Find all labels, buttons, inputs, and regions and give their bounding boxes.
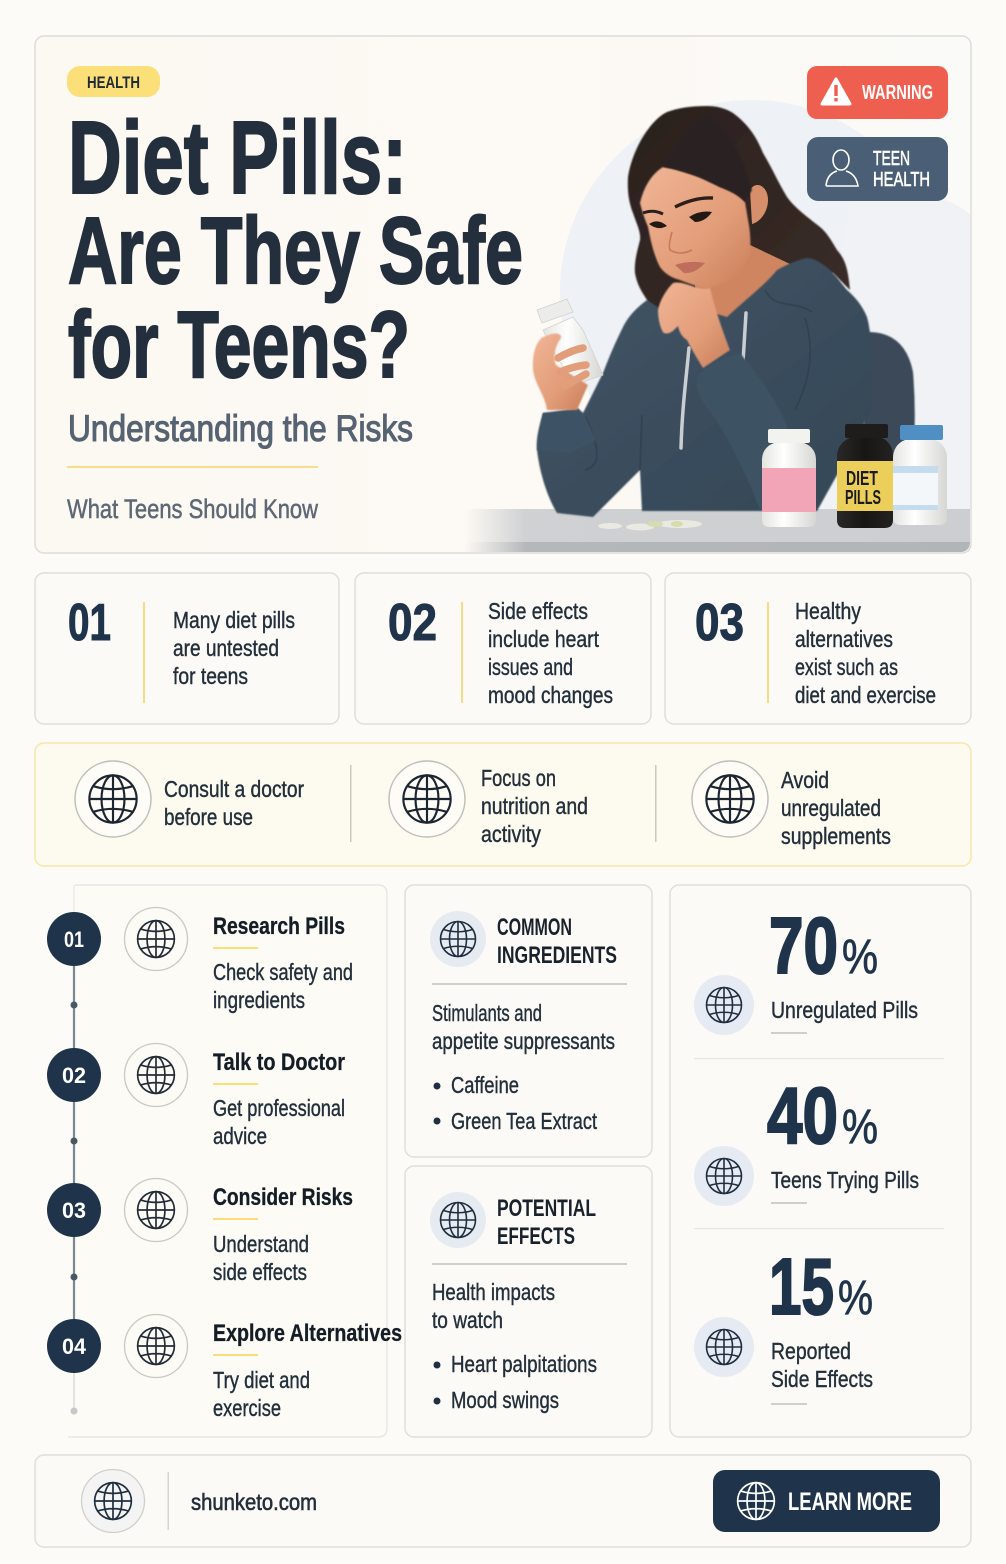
badge: teen health: TEEN xyxy=(873,148,910,170)
panel: potential effects: EFFECTS xyxy=(497,1223,575,1250)
icon: website globe xyxy=(82,1470,144,1532)
bottle in hand xyxy=(537,299,603,383)
panel: statistics xyxy=(670,885,971,1437)
advice: focus on nutrition xyxy=(389,761,588,847)
step 01: Check safety and xyxy=(213,959,353,985)
panel: key point 02 xyxy=(355,573,651,724)
step 01 xyxy=(47,908,353,1013)
panel: hero xyxy=(35,36,971,553)
badge: teen health: HEALTH xyxy=(873,169,930,191)
fingers on bottle xyxy=(558,348,586,386)
panel: key point 02: 02 xyxy=(388,594,437,652)
panel: key point 02: include heart xyxy=(488,626,600,652)
panel: potential effects xyxy=(405,1166,652,1437)
panel: key point 03: 03 xyxy=(695,594,744,652)
hand under chin xyxy=(658,283,730,368)
panel: key point 03 xyxy=(665,573,971,724)
panel: potential effects: Health impacts xyxy=(432,1279,555,1305)
panel: key point 01: for teens xyxy=(173,663,248,689)
panel: potential effects: POTENTIAL xyxy=(497,1195,596,1222)
stat: 15%: Side Effects xyxy=(771,1366,873,1392)
hoodie body xyxy=(537,258,873,517)
badge: teen health xyxy=(807,137,948,201)
step 04 xyxy=(47,1314,402,1421)
bottle: DIET PILLS xyxy=(837,424,893,528)
bottle: DIET PILLS: DIET xyxy=(846,468,878,490)
panel: key point 01: Many diet pills xyxy=(173,607,295,633)
stat: 40% xyxy=(694,1071,919,1206)
eyebrows, eyes, mouth xyxy=(643,198,713,273)
advice: consult a doctor xyxy=(75,761,304,837)
panel: common ingredients xyxy=(405,885,652,1157)
ear xyxy=(750,185,768,224)
panel: footer xyxy=(35,1455,971,1547)
chair xyxy=(864,331,916,458)
stat: 40%: % xyxy=(842,1101,878,1154)
stat: 40%: Teens Trying Pills xyxy=(771,1167,919,1193)
panel: key point 03: exist such as xyxy=(795,654,898,680)
face xyxy=(640,167,750,288)
stat: 40%: 40 xyxy=(767,1071,838,1160)
step 02: Get professional xyxy=(213,1095,345,1121)
stat: 70%: 70 xyxy=(769,901,838,990)
website address: shunketo.com xyxy=(191,1489,317,1515)
advice: avoid unregulated supplements: supplements xyxy=(781,823,891,849)
step 04: Try diet and xyxy=(213,1367,310,1393)
panel: key point 01: 01 xyxy=(68,594,111,652)
button: learn more xyxy=(713,1470,940,1532)
stat: 70%: % xyxy=(842,931,878,984)
title: Diet Pills: xyxy=(68,100,407,215)
panel: advice band xyxy=(35,743,971,866)
step 03: Understand xyxy=(213,1231,309,1257)
panel: key point 02: mood changes xyxy=(488,682,613,708)
advice: focus on nutrition: activity xyxy=(481,821,541,847)
advice: focus on nutrition: nutrition and xyxy=(481,793,588,819)
category tag: HEALTH xyxy=(87,73,140,92)
title: Are They Safe xyxy=(68,198,523,304)
bottle: DIET PILLS: PILLS xyxy=(845,487,881,509)
left cuff xyxy=(537,408,596,452)
stat: 15% xyxy=(694,1242,873,1405)
step 04: exercise xyxy=(213,1395,281,1421)
panel: key point 02: issues and xyxy=(488,654,573,680)
badge: warning xyxy=(807,66,948,119)
table xyxy=(465,509,971,553)
stat: 70%: Unregulated Pills xyxy=(771,997,918,1023)
bottle: blue cap xyxy=(893,425,947,525)
badge: warning: WARNING xyxy=(862,82,933,104)
panel: potential effects: Mood swings xyxy=(451,1387,559,1413)
stat: 15%: 15 xyxy=(769,1242,834,1331)
left hand xyxy=(533,334,588,410)
stat: 15%: % xyxy=(838,1272,873,1325)
advice: consult a doctor: before use xyxy=(164,804,253,830)
panel: key point 01 xyxy=(35,573,339,724)
stat: 15%: Reported xyxy=(771,1338,851,1364)
step 02: 02 xyxy=(62,1063,86,1088)
bottle: pink label xyxy=(762,429,816,527)
hair back xyxy=(626,104,851,309)
panel: common ingredients: Green Tea Extract xyxy=(451,1108,597,1134)
panel: common ingredients: appetite suppressants xyxy=(432,1028,615,1054)
panel: key point 03: alternatives xyxy=(795,626,893,652)
panel: key point 02: Side effects xyxy=(488,598,588,624)
panel: steps timeline xyxy=(47,885,402,1437)
button: learn more: LEARN MORE xyxy=(788,1488,912,1516)
title: for Teens? xyxy=(68,292,410,398)
illustration: teen holding pill bottle at a table xyxy=(465,100,971,553)
step 01: Research Pills xyxy=(213,913,345,940)
panel: key point 03: Healthy xyxy=(795,598,861,624)
panel: common ingredients: COMMON xyxy=(497,914,572,941)
category tag xyxy=(67,66,160,97)
panel: key point 01: are untested xyxy=(173,635,279,661)
panel: key point 03: diet and exercise xyxy=(795,682,936,708)
panel: potential effects: Heart palpitations xyxy=(451,1351,597,1377)
advice: avoid unregulated supplements xyxy=(692,761,891,849)
advice: avoid unregulated supplements: Avoid xyxy=(781,767,829,793)
step 03: side effects xyxy=(213,1259,307,1285)
step 03: Consider Risks xyxy=(213,1184,353,1211)
drawstrings xyxy=(681,313,746,448)
loose pills xyxy=(598,520,702,530)
step 01: 01 xyxy=(64,927,84,952)
step 02: advice xyxy=(213,1123,267,1149)
step 04: Explore Alternatives xyxy=(213,1320,402,1347)
step 03 xyxy=(47,1178,353,1285)
panel: potential effects: to watch xyxy=(432,1307,503,1333)
step 02: Talk to Doctor xyxy=(213,1049,345,1076)
neck xyxy=(695,245,790,318)
step 01: ingredients xyxy=(213,987,305,1013)
step 03: 03 xyxy=(62,1198,86,1223)
stat: 70% xyxy=(694,901,918,1035)
tagline: What Teens Should Know xyxy=(67,494,318,524)
hoodie folds xyxy=(585,290,812,470)
advice: avoid unregulated supplements: unregulated xyxy=(781,795,881,821)
sleeve on propped arm xyxy=(722,354,787,510)
step 04: 04 xyxy=(62,1334,87,1359)
advice: consult a doctor: Consult a doctor xyxy=(164,776,304,802)
panel: common ingredients: Stimulants and xyxy=(432,1000,542,1026)
advice: focus on nutrition: Focus on xyxy=(481,765,556,791)
title xyxy=(68,100,523,398)
panel: common ingredients: INGREDIENTS xyxy=(497,942,617,969)
step 02 xyxy=(47,1044,345,1149)
panel: common ingredients: Caffeine xyxy=(451,1072,519,1098)
hair front xyxy=(662,166,753,202)
subtitle: Understanding the Risks xyxy=(68,408,413,449)
